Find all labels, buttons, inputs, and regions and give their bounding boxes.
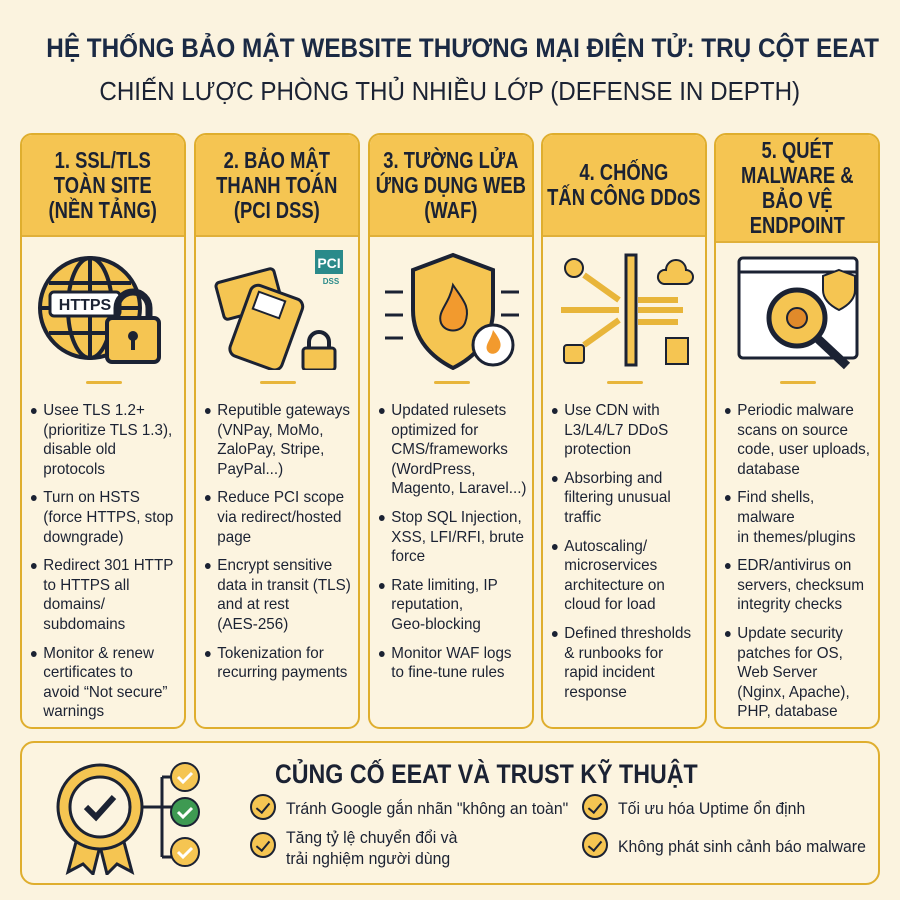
bullets: via redirect/hosted bbox=[217, 509, 341, 526]
icon: card terminal: DSS bbox=[323, 277, 340, 286]
icon: scan window bbox=[738, 256, 858, 370]
bullets: database bbox=[737, 461, 800, 478]
bullets: (WordPress, bbox=[391, 461, 475, 478]
panel: EEAT trust: trải nghiệm người dùng bbox=[286, 849, 450, 868]
bullets: malware bbox=[737, 509, 795, 526]
bullets: Updated rulesets bbox=[391, 402, 506, 419]
heading: (PCI DSS) bbox=[234, 196, 320, 222]
bullets bbox=[30, 402, 173, 720]
bullets: EDR/antivirus on bbox=[737, 557, 851, 574]
bullets: data in transit (TLS) bbox=[217, 577, 351, 594]
bullets: rapid incident bbox=[564, 664, 655, 681]
bullets: Magento, Laravel...) bbox=[391, 480, 526, 497]
heading bbox=[22, 135, 184, 237]
bullets: XSS, LFI/RFI, brute bbox=[391, 529, 524, 546]
panel: EEAT trust: Không phát sinh cảnh báo malware bbox=[618, 837, 866, 856]
bullets: Autoscaling/ bbox=[564, 538, 647, 555]
bullets: scans on source bbox=[737, 422, 848, 439]
icon: globe https lock: HTTPS bbox=[59, 297, 112, 314]
bullets: servers, checksum bbox=[737, 577, 864, 594]
panel: SSL/TLS bbox=[20, 133, 186, 729]
bullets: page bbox=[217, 529, 251, 546]
icon: card terminal: PCI bbox=[317, 255, 341, 271]
bullets: Turn on HSTS bbox=[43, 489, 140, 506]
bullets: filtering unusual bbox=[564, 489, 671, 506]
icon: shield fire bbox=[385, 252, 519, 370]
bullets: certificates to bbox=[43, 664, 133, 681]
heading bbox=[370, 135, 532, 237]
bullets: Usee TLS 1.2+ bbox=[43, 402, 145, 419]
bullets: Periodic malware bbox=[737, 402, 854, 419]
bullets: patches for OS, bbox=[737, 645, 843, 662]
icon: card terminal bbox=[214, 250, 343, 370]
bullets: Absorbing and bbox=[564, 470, 662, 487]
bullets: (prioritize TLS 1.3), bbox=[43, 422, 172, 439]
panel: DDoS bbox=[541, 133, 707, 729]
icon: globe https lock bbox=[38, 256, 161, 364]
bullets: Geo-blocking bbox=[391, 616, 481, 633]
bullets: Update security bbox=[737, 625, 843, 642]
icon: ddos wall bbox=[561, 254, 694, 366]
heading: CỦNG CỐ EEAT VÀ TRUST KỸ THUẬT bbox=[275, 759, 698, 789]
bullets: CMS/frameworks bbox=[391, 441, 508, 458]
bullets: optimized for bbox=[391, 422, 478, 439]
bullets: Monitor WAF logs bbox=[391, 645, 512, 662]
bullets: Defined thresholds bbox=[564, 625, 691, 642]
bullets: (VNPay, MoMo, bbox=[217, 422, 323, 439]
bullets: domains/ bbox=[43, 596, 105, 613]
bullets: PHP, database bbox=[737, 703, 838, 720]
bullets: warnings bbox=[43, 703, 104, 720]
bullets: to HTTPS all bbox=[43, 577, 129, 594]
bullets: response bbox=[564, 684, 627, 701]
bullets bbox=[378, 402, 526, 681]
bullets: Reduce PCI scope bbox=[217, 489, 344, 506]
bullets: Web Server bbox=[737, 664, 817, 681]
bullets: Use CDN with bbox=[564, 402, 660, 419]
heading bbox=[543, 135, 705, 237]
bullets: to fine-tune rules bbox=[391, 664, 505, 681]
panel: EEAT trust bbox=[20, 741, 880, 885]
heading: BẢO VỆ bbox=[762, 187, 832, 213]
heading bbox=[716, 135, 878, 243]
bullets: reputation, bbox=[391, 596, 463, 613]
panel: EEAT trust: Tránh Google gắn nhãn "không an toàn" bbox=[286, 799, 568, 818]
bullets bbox=[204, 402, 351, 681]
bullets: Stop SQL Injection, bbox=[391, 509, 522, 526]
bullets: Encrypt sensitive bbox=[217, 557, 332, 574]
heading: TOÀN SITE bbox=[54, 172, 152, 198]
heading: MALWARE & bbox=[741, 162, 853, 188]
title: HỆ THỐNG BẢO MẬT WEBSITE THƯƠNG MẠI ĐIỆN TỬ: TRỤ CỘT EEAT bbox=[46, 33, 879, 63]
bullets: recurring payments bbox=[217, 664, 347, 681]
bullets: traffic bbox=[564, 509, 601, 526]
heading bbox=[196, 135, 358, 237]
heading: 5. QUÉT bbox=[761, 137, 833, 163]
benefit items bbox=[250, 794, 866, 868]
bullets: avoid “Not secure” bbox=[43, 684, 167, 701]
heading: THANH TOÁN bbox=[216, 172, 338, 198]
bullets: integrity checks bbox=[737, 596, 842, 613]
bullets: cloud for load bbox=[564, 596, 656, 613]
bullets: force bbox=[391, 548, 425, 565]
panel: EEAT trust: Tối ưu hóa Uptime ổn định bbox=[618, 799, 805, 818]
bullets: L3/L4/L7 DDoS bbox=[564, 422, 668, 439]
panel: payment security bbox=[194, 133, 360, 729]
panel: malware bbox=[714, 133, 880, 729]
bullets: downgrade) bbox=[43, 529, 124, 546]
panel: WAF bbox=[368, 133, 534, 729]
bullets: Monitor & renew bbox=[43, 645, 154, 662]
panel: EEAT trust: Tăng tỷ lệ chuyển đổi và bbox=[286, 828, 457, 847]
heading: (NỀN TẢNG) bbox=[49, 196, 157, 222]
bullets bbox=[724, 402, 870, 720]
heading: TẤN CÔNG DDoS bbox=[547, 184, 701, 210]
bullets: & runbooks for bbox=[564, 645, 663, 662]
heading: (WAF) bbox=[424, 196, 478, 222]
heading: ỨNG DỤNG WEB bbox=[376, 172, 526, 198]
bullets: microservices bbox=[564, 557, 657, 574]
bullets: protection bbox=[564, 441, 631, 458]
bullets: code, user uploads, bbox=[737, 441, 870, 458]
heading: 4. CHỐNG bbox=[580, 159, 668, 185]
bullets: Find shells, bbox=[737, 489, 814, 506]
bullets: Reputible gateways bbox=[217, 402, 350, 419]
bullets: disable old bbox=[43, 441, 116, 458]
heading: 3. TƯỜNG LỬA bbox=[383, 146, 519, 172]
bullets: and at rest bbox=[217, 596, 289, 613]
bullets: ZaloPay, Stripe, bbox=[217, 441, 324, 458]
bullets: Tokenization for bbox=[217, 645, 324, 662]
heading: ENDPOINT bbox=[749, 212, 845, 238]
heading: 2. BẢO MẬT bbox=[224, 146, 330, 172]
bullets: (AES-256) bbox=[217, 616, 288, 633]
bullets: (force HTTPS, stop bbox=[43, 509, 173, 526]
bullets: (Nginx, Apache), bbox=[737, 684, 850, 701]
bullets: PayPal...) bbox=[217, 461, 283, 478]
bullets: Redirect 301 HTTP bbox=[43, 557, 173, 574]
bullets: protocols bbox=[43, 461, 105, 478]
heading: 1. SSL/TLS bbox=[55, 146, 151, 172]
icon: award badge bbox=[56, 762, 200, 875]
bullets: in themes/plugins bbox=[737, 529, 856, 546]
bullets: Rate limiting, IP bbox=[391, 577, 498, 594]
bullets: subdomains bbox=[43, 616, 125, 633]
bullets bbox=[552, 402, 691, 701]
bullets: architecture on bbox=[564, 577, 665, 594]
subtitle: CHIẾN LƯỢC PHÒNG THỦ NHIỀU LỚP (DEFENSE IN DEPTH) bbox=[100, 76, 800, 106]
